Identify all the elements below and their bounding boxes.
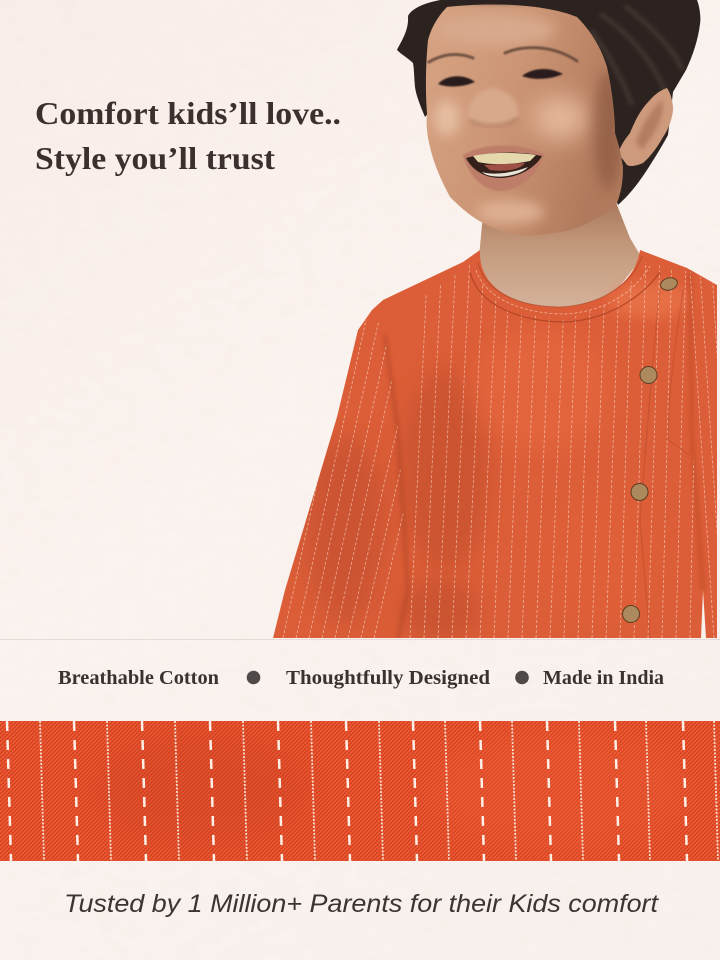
right sleeve stitching <box>690 272 717 638</box>
mouth <box>463 146 544 191</box>
fabric wash shading <box>400 370 490 570</box>
orange kurta <box>270 250 720 640</box>
ear inner shadow <box>636 100 663 150</box>
divider line <box>0 639 720 640</box>
trust statement: Tusted by 1 Million+ Parents for their Kids comfort <box>64 890 659 918</box>
body stitching <box>410 255 698 638</box>
face shading <box>420 0 622 224</box>
left sleeve stitching <box>282 320 404 638</box>
feature strip <box>58 667 664 689</box>
ear <box>618 88 673 166</box>
hair highlights <box>590 6 682 105</box>
upper teeth <box>473 153 536 164</box>
seams <box>385 335 408 638</box>
buttons <box>622 276 679 622</box>
feature: breathable cotton: Breathable Cotton <box>58 667 219 689</box>
headline: Style you’ll trust <box>35 140 275 176</box>
face <box>426 4 623 236</box>
dotted stitches <box>40 721 718 861</box>
headline <box>35 95 341 176</box>
hair <box>397 0 700 205</box>
second bullet <box>515 671 529 684</box>
headline: Comfort kids’ll love.. <box>35 95 341 131</box>
neck opening edge <box>478 256 642 307</box>
photo: smiling child in orange kurta <box>270 0 720 640</box>
eyebrows <box>429 48 577 62</box>
tongue <box>484 163 525 171</box>
fabric close-up band <box>0 721 720 861</box>
nose shadow <box>470 118 518 126</box>
feature: thoughtfully designed: Thoughtfully Designed <box>286 667 490 689</box>
nose <box>468 88 518 126</box>
lower teeth <box>482 167 528 177</box>
neck <box>478 200 642 308</box>
collar <box>470 266 660 322</box>
eye sockets <box>438 69 563 86</box>
feature: made in india: Made in India <box>543 667 664 689</box>
bullet <box>247 671 260 684</box>
dashed running stitches <box>7 721 687 861</box>
fabric tone <box>104 742 664 838</box>
